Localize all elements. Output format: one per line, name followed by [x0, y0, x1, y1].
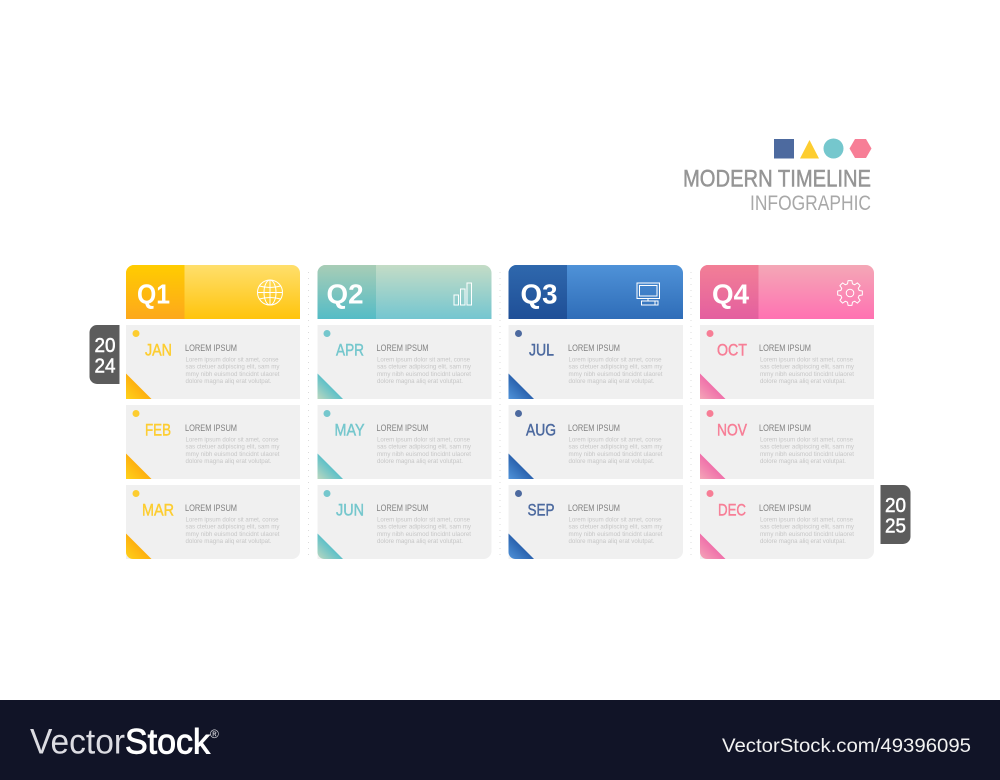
- Q2 header: Q2: [326, 278, 364, 310]
- card: JAN: Lorem ipsum dolor sit amet, conse: [186, 356, 279, 364]
- card: JAN: JAN: [145, 342, 172, 360]
- card: APR: Lorem ipsum dolor sit amet, conse: [377, 356, 471, 364]
- card: FEB: Lorem ipsum dolor sit amet, conse: [186, 436, 279, 444]
- card: SEP: LOREM IPSUM: [568, 503, 620, 514]
- icon: gear: [838, 281, 862, 305]
- footer banner: [0, 700, 1000, 780]
- card: JUN: LOREM IPSUM: [376, 503, 429, 514]
- card: MAY: [318, 405, 492, 479]
- card: FEB: mmy nibh euismod tincidnt ulaoret: [186, 451, 280, 458]
- year tab 2025: [880, 485, 911, 544]
- panel: Q2 column: [318, 265, 492, 559]
- card: OCT: mmy nibh euismod tincidnt ulaoret: [760, 371, 854, 378]
- Q3 header: [508, 265, 683, 319]
- card: FEB: LOREM IPSUM: [185, 423, 237, 434]
- card: AUG: sas ctetuer adipiscing elit, sam my: [568, 444, 663, 451]
- footer logo: Vector: [30, 722, 125, 762]
- year tab 2025: 25: [885, 516, 906, 538]
- card: NOV: mmy nibh euismod tincidnt ulaoret: [760, 451, 854, 458]
- card: NOV: LOREM IPSUM: [759, 423, 811, 434]
- card: JAN: sas ctetuer adipiscing elit, sam my: [186, 364, 280, 371]
- card: MAR: [126, 485, 300, 559]
- card: JUN: [318, 485, 492, 559]
- card: NOV: [700, 405, 874, 479]
- card: DEC: Lorem ipsum dolor sit amet, conse: [760, 516, 854, 524]
- card: SEP: sas ctetuer adipiscing elit, sam my: [568, 524, 663, 531]
- card: SEP: [508, 485, 683, 559]
- card: DEC: DEC: [718, 502, 746, 520]
- footer logo: Stock: [125, 722, 210, 762]
- card: AUG: LOREM IPSUM: [568, 423, 620, 434]
- card: DEC: [700, 485, 874, 559]
- card: JAN: dolore magna aliq erat volutpat.: [186, 378, 272, 385]
- card: FEB: dolore magna aliq erat volutpat.: [186, 458, 272, 465]
- card: NOV: sas ctetuer adipiscing elit, sam my: [760, 444, 855, 451]
- icon: bar chart: [454, 283, 472, 305]
- card: NOV: Lorem ipsum dolor sit amet, conse: [760, 436, 854, 444]
- card: JAN: mmy nibh euismod tincidnt ulaoret: [186, 371, 280, 378]
- card: APR: [318, 325, 492, 399]
- card: DEC: LOREM IPSUM: [759, 503, 811, 514]
- card: OCT: [700, 325, 874, 399]
- card: MAR: dolore magna aliq erat volutpat.: [186, 538, 272, 545]
- card: SEP: Lorem ipsum dolor sit amet, conse: [568, 516, 662, 524]
- footer logo: ®: [210, 727, 219, 741]
- card: MAR: MAR: [142, 502, 174, 520]
- year tab 2024: [90, 325, 120, 384]
- card: APR: LOREM IPSUM: [376, 343, 429, 354]
- card: JAN: LOREM IPSUM: [185, 343, 237, 354]
- card: JUN: JUN: [336, 502, 364, 520]
- title: MODERN TIMELINE: [683, 166, 871, 193]
- card: JUN: sas ctetuer adipiscing elit, sam my: [377, 524, 472, 531]
- card: AUG: dolore magna aliq erat volutpat.: [568, 458, 655, 465]
- footer logo: [30, 722, 219, 762]
- panel: Q1 column: [126, 265, 300, 559]
- card: APR: sas ctetuer adipiscing elit, sam my: [377, 364, 472, 371]
- footer image id: VectorStock.com/49396095: [722, 736, 971, 757]
- card: MAR: sas ctetuer adipiscing elit, sam my: [186, 524, 280, 531]
- card: AUG: Lorem ipsum dolor sit amet, conse: [568, 436, 662, 444]
- Q3 header: Q3: [520, 278, 558, 310]
- card: JUL: [508, 325, 683, 399]
- card: MAR: mmy nibh euismod tincidnt ulaoret: [186, 531, 280, 538]
- card: AUG: mmy nibh euismod tincidnt ulaoret: [568, 451, 663, 458]
- card: JUL: Lorem ipsum dolor sit amet, conse: [568, 356, 662, 364]
- card: AUG: AUG: [526, 422, 556, 440]
- card: JUN: Lorem ipsum dolor sit amet, conse: [377, 516, 471, 524]
- card: JUL: sas ctetuer adipiscing elit, sam my: [568, 364, 663, 371]
- card: FEB: FEB: [145, 422, 171, 440]
- icon: globe: [258, 280, 282, 305]
- card: OCT: Lorem ipsum dolor sit amet, conse: [760, 356, 854, 364]
- card: JAN: [126, 325, 300, 399]
- card: OCT: dolore magna aliq erat volutpat.: [760, 378, 846, 385]
- dotted column dividers: [308, 272, 691, 556]
- year tab 2024: 20: [94, 335, 116, 357]
- card: JUN: dolore magna aliq erat volutpat.: [377, 538, 463, 545]
- card: FEB: sas ctetuer adipiscing elit, sam my: [186, 444, 280, 451]
- card: MAY: Lorem ipsum dolor sit amet, conse: [377, 436, 471, 444]
- card: APR: dolore magna aliq erat volutpat.: [377, 378, 463, 385]
- icon: computer: [637, 283, 660, 305]
- card: MAR: LOREM IPSUM: [185, 503, 237, 514]
- card: DEC: sas ctetuer adipiscing elit, sam my: [760, 524, 855, 531]
- year tab 2024: 24: [94, 356, 116, 378]
- Q2 header: [318, 265, 492, 319]
- card: MAR: Lorem ipsum dolor sit amet, conse: [186, 516, 279, 524]
- card: SEP: mmy nibh euismod tincidnt ulaoret: [568, 531, 663, 538]
- panel: Q3 column: [508, 265, 683, 559]
- card: MAY: mmy nibh euismod tincidnt ulaoret: [377, 451, 471, 458]
- card: JUL: JUL: [529, 342, 554, 360]
- card: JUL: dolore magna aliq erat volutpat.: [568, 378, 655, 385]
- card: MAY: LOREM IPSUM: [376, 423, 429, 434]
- icon group: title shapes: [774, 138, 872, 158]
- Q1 header: Q1: [137, 278, 170, 310]
- card: MAY: dolore magna aliq erat volutpat.: [377, 458, 463, 465]
- card: APR: APR: [336, 342, 364, 360]
- card: APR: mmy nibh euismod tincidnt ulaoret: [377, 371, 471, 378]
- card: OCT: LOREM IPSUM: [759, 343, 811, 354]
- card: OCT: OCT: [717, 342, 747, 360]
- card: JUL: mmy nibh euismod tincidnt ulaoret: [568, 371, 663, 378]
- card: DEC: mmy nibh euismod tincidnt ulaoret: [760, 531, 854, 538]
- card: SEP: dolore magna aliq erat volutpat.: [568, 538, 655, 545]
- card: NOV: dolore magna aliq erat volutpat.: [760, 458, 846, 465]
- card: MAY: MAY: [334, 422, 364, 440]
- title: [683, 166, 871, 215]
- card: AUG: [508, 405, 683, 479]
- panel: Q4 column: [700, 265, 874, 559]
- Q1 header: [126, 265, 300, 319]
- card: DEC: dolore magna aliq erat volutpat.: [760, 538, 846, 545]
- title: INFOGRAPHIC: [750, 192, 871, 215]
- Q4 header: Q4: [712, 278, 749, 310]
- Q4 header: [700, 265, 874, 319]
- card: FEB: [126, 405, 300, 479]
- card: NOV: NOV: [717, 422, 747, 440]
- card: SEP: SEP: [528, 502, 554, 520]
- card: MAY: sas ctetuer adipiscing elit, sam my: [377, 444, 472, 451]
- year tab 2025: 20: [885, 495, 906, 517]
- card: JUN: mmy nibh euismod tincidnt ulaoret: [377, 531, 471, 538]
- card: OCT: sas ctetuer adipiscing elit, sam my: [760, 364, 855, 371]
- card: JUL: LOREM IPSUM: [568, 343, 620, 354]
